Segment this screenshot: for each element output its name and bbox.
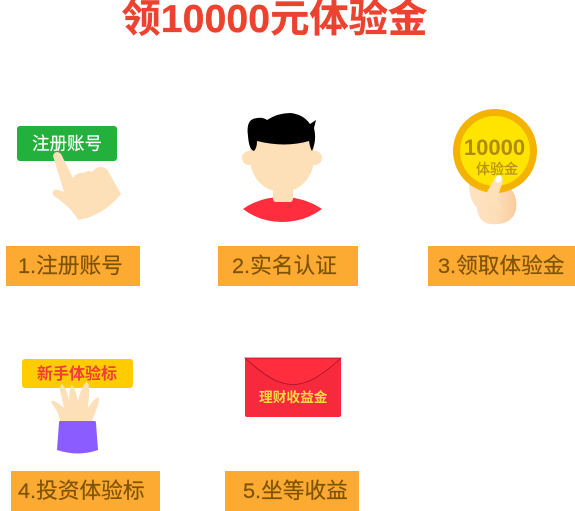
icon: red envelope: [245, 358, 341, 417]
icon: red envelope: 理财收益金: [259, 389, 328, 405]
icon: person avatar: [242, 113, 322, 222]
step 4 label: 4.投资体验标: [18, 478, 145, 503]
step 2 label: [218, 246, 358, 286]
step 4 label: [11, 471, 160, 511]
step 2 label: 2.实名认证: [232, 253, 337, 278]
icon: register button with pointing hand: [17, 126, 121, 220]
icon: new user bid badge with raised hand: [22, 359, 133, 454]
step 1 label: 1.注册账号: [18, 253, 123, 278]
icon: gold coin held by hand: [453, 109, 537, 224]
icon: register button with pointing hand: 注册账号: [32, 134, 102, 154]
step 3 label: [428, 246, 575, 286]
step 3 label: 3.领取体验金: [438, 253, 565, 278]
step 5 label: [225, 471, 359, 511]
step 1 label: [6, 246, 140, 286]
icon: gold coin held by hand: 10000: [464, 135, 525, 160]
icon: new user bid badge with raised hand: 新手体验标: [37, 364, 117, 383]
icon: gold coin held by hand: 体验金: [476, 161, 518, 177]
step 5 label: 5.坐等收益: [243, 478, 348, 503]
